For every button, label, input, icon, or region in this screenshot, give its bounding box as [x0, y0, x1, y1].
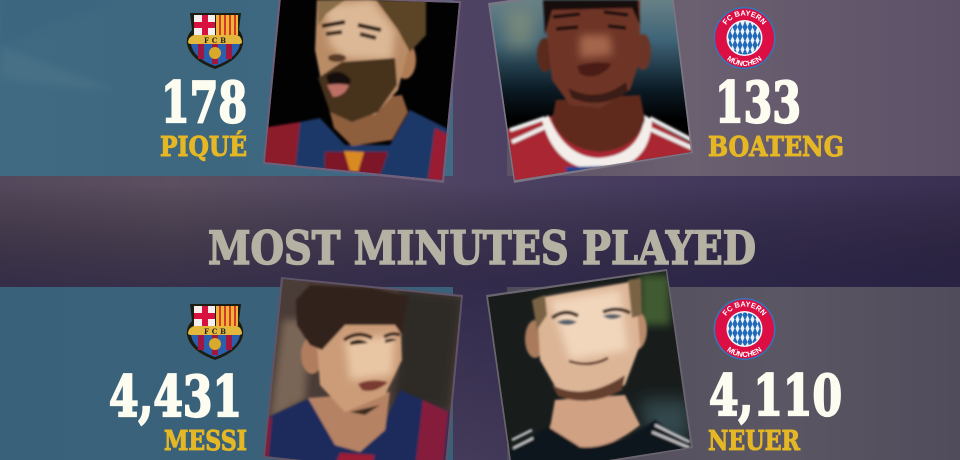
crest: bayern top: MÜNCHEN	[727, 56, 762, 66]
crest: bayern bottom: MÜNCHEN	[727, 346, 762, 357]
photo: pique	[262, 0, 461, 185]
panel: top right grey	[507, 0, 960, 176]
panel: bottom right grey	[507, 287, 960, 460]
crest: bayern top: FC BAYERN	[722, 10, 767, 25]
stat: pique	[160, 70, 247, 163]
panel: bottom left blue	[0, 287, 453, 460]
photo: neuer	[486, 269, 693, 460]
stat: pique: PIQUÉ	[160, 130, 247, 163]
crest: bayern bottom	[714, 298, 776, 360]
stat: messi: MESSI	[164, 426, 247, 457]
panel: top left blue	[0, 0, 453, 176]
stat: neuer: 4,110	[709, 363, 842, 429]
heading: most minutes played: MOST MINUTES PLAYED	[208, 221, 756, 275]
stat: boateng: 133	[715, 70, 801, 136]
photo: boateng	[488, 0, 695, 190]
crest: bayern top	[714, 7, 776, 69]
stat: messi	[109, 364, 247, 457]
crest: barcelona bottom	[187, 304, 243, 360]
crest: barcelona bottom: FCB	[204, 327, 226, 336]
crest: bayern bottom: FC BAYERN	[722, 301, 767, 316]
stat: boateng: BOATENG	[708, 132, 844, 163]
stat: neuer	[708, 363, 842, 457]
crest: barcelona top	[187, 13, 243, 69]
photo: messi	[262, 277, 463, 460]
stat: neuer: NEUER	[708, 426, 800, 457]
stat: messi: 4,431	[109, 364, 242, 430]
crest: barcelona top: FCB	[204, 36, 226, 45]
stat: pique: 178	[161, 70, 247, 136]
stat: boateng	[708, 70, 844, 163]
